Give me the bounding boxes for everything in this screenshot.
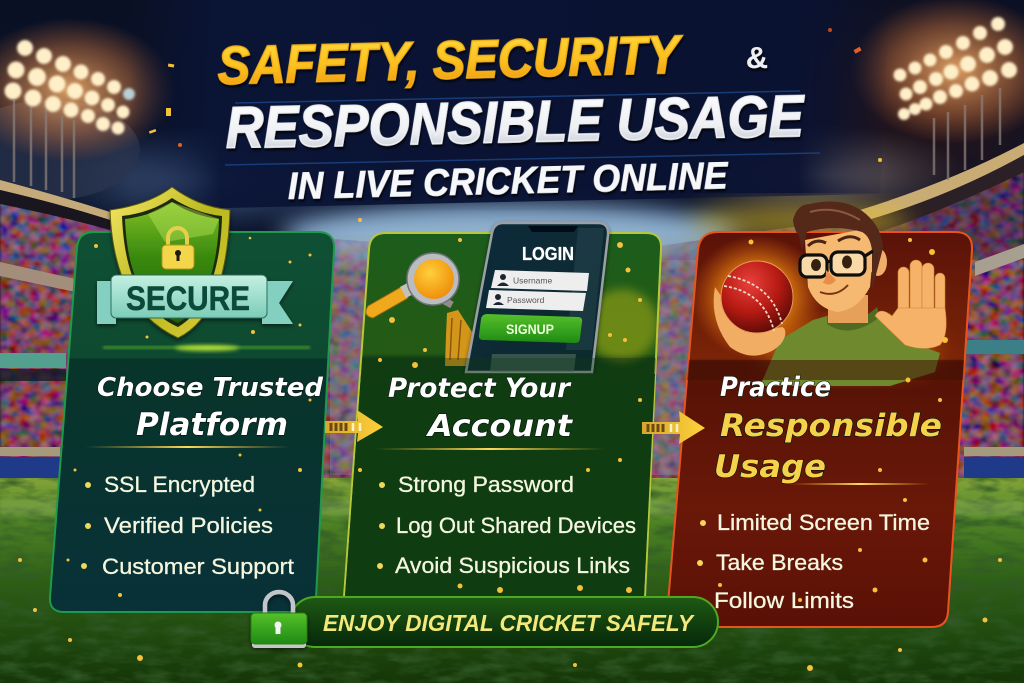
floodlights right: [850, 0, 1024, 180]
heading: choose trusted platform: [97, 373, 323, 443]
list: usage points: Take Breaks: [716, 550, 843, 575]
eyebrows: [808, 237, 860, 246]
glasses: [800, 251, 873, 277]
signup button: SIGNUP: [506, 322, 554, 337]
list: account points: Log Out Shared Devices: [396, 513, 636, 538]
callout: enjoy digital cricket safely: [251, 592, 718, 648]
username field: [491, 270, 589, 291]
panel: protect your account: [344, 223, 661, 597]
raised stop hand: [875, 260, 946, 348]
panel: choose trusted platform: [50, 187, 334, 612]
icon: magnifying glass: [366, 253, 474, 366]
icon: padlock: [162, 228, 194, 269]
face and neck: [805, 228, 887, 323]
icon: green padlock: [251, 592, 307, 648]
arrow: platform to account: [325, 410, 383, 442]
glow line under shield: [103, 345, 310, 351]
heading: protect your account: [388, 373, 574, 444]
panel: practice responsible usage: [666, 202, 972, 627]
heading: practice responsible usage: Practice: [720, 372, 831, 403]
list: platform points: SSL Encrypted: [104, 472, 255, 497]
icon: cartoon character with ball: [714, 202, 946, 386]
heading: choose trusted platform: Platform: [136, 407, 288, 443]
secure label: SECURE: [126, 280, 250, 318]
list: account points: Strong Password: [398, 472, 574, 497]
ribbon tails: [97, 281, 116, 324]
hair: [793, 202, 883, 290]
icon: secure shield: [97, 187, 293, 338]
title line 3: in live cricket online: IN LIVE CRICKET ONLINE: [287, 155, 730, 208]
list: platform points: Customer Support: [102, 554, 294, 579]
callout text: ENJOY DIGITAL CRICKET SAFELY: [323, 610, 696, 636]
title line 2: responsible usage: RESPONSIBLE USAGE: [225, 84, 806, 161]
heading: choose trusted platform: Choose Trusted: [97, 373, 323, 403]
title block: [130, 0, 890, 210]
sweater and arms: [760, 316, 940, 386]
list: account points: [377, 472, 636, 578]
title ampersand: &: [746, 40, 768, 75]
signup button: [479, 314, 582, 343]
heading: protect your account: Protect Your: [388, 373, 572, 404]
login heading: LOGIN: [522, 244, 574, 264]
floodlights left: [0, 18, 175, 198]
arrow: account to usage: [642, 411, 705, 444]
list: usage points: [697, 510, 930, 613]
username field: Username: [513, 276, 552, 286]
password field: Password: [507, 295, 545, 305]
list: platform points: [81, 472, 294, 579]
heading: practice responsible usage: [714, 372, 942, 485]
list: usage points: Limited Screen Time: [717, 510, 930, 535]
hand holding ball: [714, 287, 783, 356]
title line 1: safety, security: SAFETY, SECURITY: [217, 25, 685, 96]
list: account points: Avoid Suspicious Links: [395, 553, 630, 578]
heading: protect your account: Account: [426, 409, 574, 444]
list: usage points: Follow Limits: [714, 588, 854, 613]
icon: phone login screen: [466, 223, 608, 372]
hazy gaps between the panels: [330, 235, 372, 475]
heading: practice responsible usage: Usage: [714, 449, 826, 485]
heading: practice responsible usage: Responsible: [720, 408, 942, 444]
list: platform points: Verified Policies: [104, 513, 273, 538]
password field: [486, 290, 586, 311]
cricket ball: [721, 261, 793, 333]
